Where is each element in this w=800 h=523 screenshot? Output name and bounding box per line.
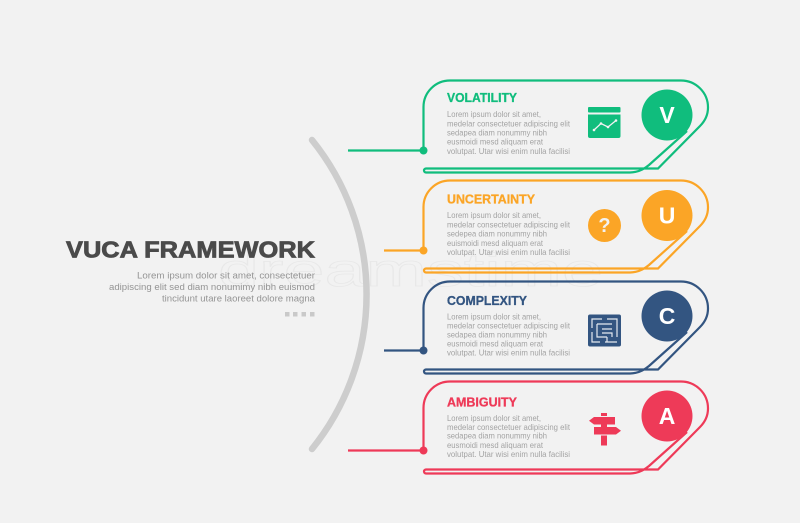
heading: UNCERTAINTY <box>447 192 536 206</box>
connector and outline <box>348 80 708 172</box>
body text <box>447 210 571 257</box>
panel: volatility <box>348 80 708 172</box>
icon: maze <box>588 314 621 346</box>
heading: AMBIGUITY <box>447 396 518 410</box>
watermark: dreamstime <box>218 244 603 296</box>
panel: ambiguity <box>348 382 708 474</box>
letter badge: A <box>659 403 675 429</box>
connector and outline <box>384 180 708 272</box>
letter badge: C <box>659 303 675 329</box>
subtitle text <box>109 270 316 304</box>
letter badge <box>642 390 692 442</box>
body text: sedapea diam nonummy nibh <box>447 431 547 441</box>
heading: COMPLEXITY <box>447 294 528 308</box>
pagination dots <box>285 312 314 316</box>
title: VUCA FRAMEWORK <box>66 236 315 262</box>
body text: sedapea diam nonummy nibh <box>447 128 547 138</box>
connector and outline <box>384 282 708 374</box>
body text: volutpat. Utar wisi enim nulla facilisi <box>447 247 570 257</box>
body text <box>447 312 571 358</box>
body text: medelar consectetuer adipiscing elit <box>447 219 571 229</box>
connector and outline <box>348 382 708 474</box>
icon: chart window <box>588 107 620 138</box>
subtitle text: Lorem ipsum dolor sit amet, consectetuer <box>137 270 316 282</box>
letter badge <box>642 190 692 241</box>
panel: uncertainty <box>384 180 708 272</box>
body text: sedapea diam nonummy nibh <box>447 329 547 339</box>
body text: eusmoidi mesd aliquam erat <box>447 440 544 450</box>
letter badge: U <box>659 202 675 228</box>
body text: medelar consectetuer adipiscing elit <box>447 321 571 331</box>
body text: sedepea diam nonummy nibh <box>447 228 547 238</box>
body text <box>447 109 571 156</box>
letter badge <box>642 290 692 342</box>
subtitle text: tincidunt utare laoreet dolore magna <box>162 294 316 304</box>
body text: Lorem ipsum dolor sit amet, <box>447 312 541 322</box>
body text: volutpat. Utar wisi enim nulla facilisi <box>447 146 570 156</box>
body text: volutpat. Utar wisi enim nulla facilisi <box>447 449 570 459</box>
icon: question mark: ? <box>598 215 611 237</box>
curved arc divider <box>312 140 367 449</box>
body text: Lorem ipsum dolor sit amet, <box>447 413 541 423</box>
letter badge <box>642 90 692 140</box>
panel: complexity <box>384 282 708 374</box>
body text: medelar consectetuer adipiscing elit <box>447 118 571 128</box>
title block <box>66 236 316 316</box>
body text: eusmoidi mesd aliquam erat <box>447 137 544 147</box>
body text: medelar consectetuer adipiscing elit <box>447 422 571 432</box>
body text: volutpat. Utar wisi enim nulla facilisi <box>447 348 570 358</box>
heading: VOLATILITY <box>447 91 518 105</box>
body text: Lorem ipsum dolor sit amet, <box>447 109 541 119</box>
body text: euismoidi mesd aliquam erat <box>447 238 544 248</box>
body text <box>447 413 571 459</box>
body text: eusmoidi mesd aliquam erat <box>447 338 544 348</box>
icon: signpost <box>589 413 621 446</box>
subtitle text: adipiscing elit sed diam nonumimy nibh euismod <box>109 282 315 293</box>
icon: question mark <box>588 209 621 242</box>
body text: Lorem ipsum dolor sit amet, <box>447 210 541 220</box>
letter badge: V <box>659 102 675 128</box>
